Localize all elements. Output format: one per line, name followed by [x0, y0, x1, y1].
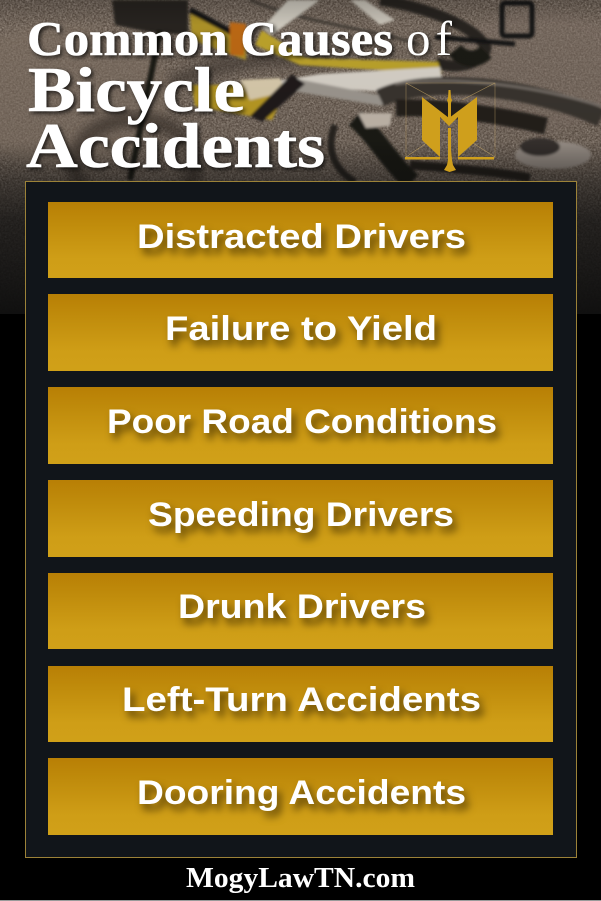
cause 3: [48, 387, 553, 464]
cause 2: [48, 294, 553, 371]
panel: causes list: [26, 182, 576, 858]
title: of: [406, 11, 453, 66]
cause 3: Poor Road Conditions: [107, 403, 497, 441]
title: Common Causes: [27, 11, 393, 66]
darkening gradient: [0, 0, 601, 314]
rear wheel upper: [380, 0, 486, 66]
yellow frame: [190, 14, 246, 60]
handlebar grip: [355, 118, 412, 182]
cause 7: Dooring Accidents: [137, 774, 466, 812]
title: Accidents: [26, 110, 325, 181]
footer website: MogyLawTN.com: [186, 862, 415, 894]
black lower background: [0, 314, 601, 901]
shadow wheel: [75, 119, 195, 211]
brake disc: [515, 141, 591, 169]
cause 6: [48, 666, 553, 742]
icon: law firm M and scales logo: [405, 83, 495, 172]
white top tube: [252, 67, 442, 92]
cause 6: Left-Turn Accidents: [122, 681, 481, 719]
cause 7: [48, 758, 553, 835]
title: [26, 11, 453, 181]
cause 2: Failure to Yield: [165, 310, 437, 348]
saddle and seat post: [112, 0, 188, 35]
title: Bicycle: [28, 54, 245, 125]
cause 4: [48, 480, 553, 557]
yellow block: [192, 85, 285, 120]
cause 1: Distracted Drivers: [137, 218, 466, 256]
large front tyre: [380, 86, 601, 118]
cause 4: Speeding Drivers: [148, 496, 454, 534]
cause 5: Drunk Drivers: [178, 588, 426, 626]
background photo: fallen bicycle on asphalt: [0, 0, 601, 314]
cause 1: [48, 202, 553, 278]
pedal: [502, 3, 532, 36]
cause 5: [48, 573, 553, 649]
